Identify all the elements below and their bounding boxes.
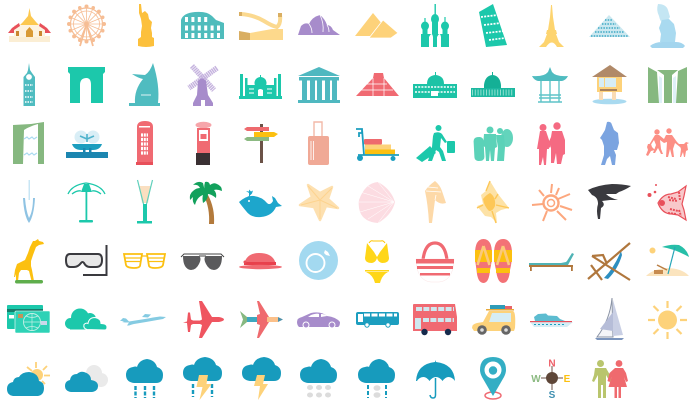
- icon: tropical fish: [648, 184, 686, 220]
- compass letter S: S: [549, 390, 556, 401]
- icon: conch shell: [425, 181, 446, 223]
- icon: us capitol: [471, 72, 515, 97]
- icon: sun: [648, 301, 687, 339]
- icon: umbrella: [416, 360, 455, 398]
- icon: leaning tower of pisa: [479, 4, 507, 47]
- icon: couple holding hands: [537, 122, 565, 165]
- icon: post box: [196, 122, 212, 165]
- icon: aviator sunglasses: [181, 254, 224, 270]
- icon: eiffel tower: [539, 5, 564, 47]
- icon: rain cloud: [126, 359, 163, 398]
- icon: palm tree: [190, 182, 222, 224]
- icon: greek temple: [298, 67, 340, 103]
- icon: snow cloud: [300, 359, 337, 398]
- icon: sedan car: [297, 312, 340, 328]
- icon: double decker bus: [413, 304, 457, 335]
- icon: pyramids: [355, 13, 398, 38]
- icon: beach bag: [416, 243, 454, 282]
- icon: cloud and sun: [7, 362, 50, 396]
- compass letter N: N: [548, 358, 556, 370]
- icon: saint basil cathedral: [421, 4, 449, 47]
- icon: deck chair: [588, 243, 630, 280]
- icon: chinese pavilion: [532, 67, 568, 102]
- icon: gardens by the bay: [648, 67, 687, 103]
- icon: pencil airplane: [240, 301, 283, 338]
- icon: thunderstorm: [242, 357, 281, 400]
- icon: sun lounger: [529, 253, 574, 271]
- icon: shutter glasses: [124, 254, 165, 268]
- icon: fountain: [66, 130, 108, 158]
- compass letter E: E: [564, 374, 571, 385]
- icon: scallop shell: [359, 182, 395, 223]
- icon: signpost: [244, 124, 278, 163]
- icon: beach hut: [592, 65, 627, 104]
- icon: family: [646, 128, 689, 157]
- icon: big ben: [24, 63, 35, 106]
- icon: statue of liberty: [138, 4, 154, 47]
- icon: hail cloud: [358, 359, 395, 398]
- icon: beach umbrella: [68, 183, 105, 222]
- icon: cocktail glass: [137, 180, 152, 224]
- icon: burj al arab: [129, 63, 160, 106]
- icon: windmill: [189, 66, 217, 106]
- icon: city bus: [356, 312, 399, 327]
- icon: giraffe: [14, 239, 44, 284]
- icon: shark: [588, 184, 631, 219]
- icon: colosseum: [181, 12, 224, 39]
- icon: clouds: [65, 308, 107, 330]
- icon: man and woman: [592, 360, 628, 398]
- icon: small airliner: [120, 314, 166, 326]
- icon: snorkel mask: [66, 245, 106, 275]
- icon: sailboat: [595, 298, 624, 340]
- icon: cruise ship: [530, 314, 573, 327]
- icon: compass: [531, 358, 571, 401]
- icon: traveller with luggage: [416, 125, 455, 162]
- icon: beach scene: [646, 245, 689, 276]
- icon: thai temple: [8, 8, 51, 42]
- icon: map pin: [480, 357, 506, 399]
- icon: flip flops: [475, 239, 512, 283]
- icon: suitcase: [308, 122, 329, 165]
- icon: backpacker: [600, 122, 619, 165]
- icon: credit cards: [7, 305, 50, 333]
- icon: whale: [239, 190, 282, 217]
- icon: diamond ring: [299, 241, 338, 280]
- icon: two surfers: [473, 126, 513, 161]
- icon: murex shell: [477, 181, 509, 223]
- icon: great wall: [239, 12, 283, 40]
- icon: yellow safari car: [472, 305, 515, 335]
- icon: ferris wheel: [67, 4, 106, 46]
- icon: louvre pyramid: [589, 15, 630, 37]
- icon: cloud with grey cloud: [65, 365, 108, 392]
- icon: mayan pyramid: [356, 73, 399, 96]
- icon: arc de triomphe: [68, 67, 105, 103]
- icon: sydney opera house: [298, 15, 340, 35]
- icon: red telephone booth: [136, 121, 153, 165]
- icon: sun shell: [532, 184, 572, 221]
- icon: starfish: [300, 185, 338, 220]
- icon: bikini: [365, 241, 389, 283]
- icon: taj mahal: [239, 74, 282, 99]
- icon: waterfall: [13, 122, 44, 164]
- icon: red airplane: [183, 301, 224, 338]
- icon: state capitol: [413, 72, 457, 98]
- icon: sun hat: [239, 253, 282, 269]
- icon: merlion: [650, 4, 685, 48]
- icon: water jet: [23, 180, 35, 223]
- icon: luggage cart: [356, 129, 399, 161]
- icon: thunderstorm with rain: [183, 357, 222, 400]
- compass letter W: W: [531, 374, 541, 385]
